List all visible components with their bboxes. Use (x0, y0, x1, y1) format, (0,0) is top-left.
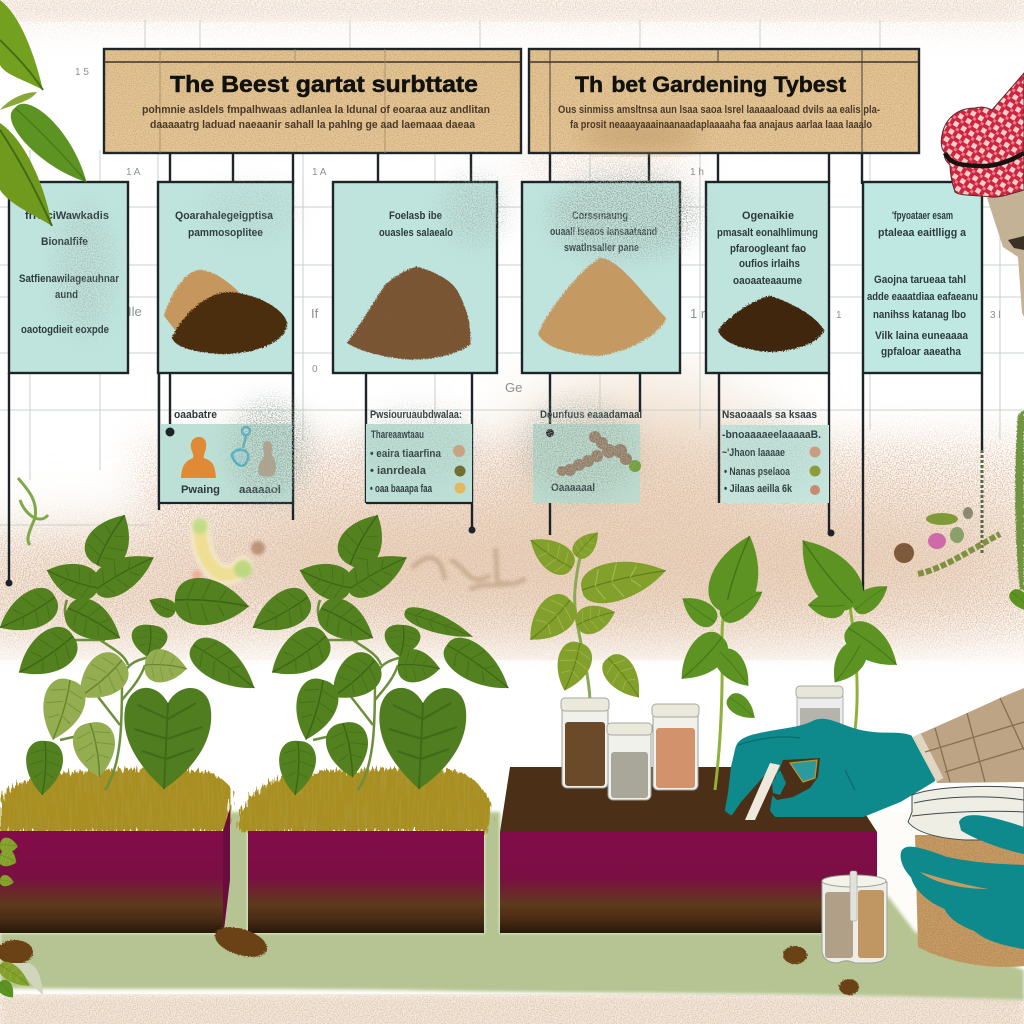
icon: teal tool (232, 427, 250, 466)
panel labels: Pwaing (181, 484, 220, 496)
icon: compost worm (557, 431, 632, 476)
list text: ~'Jhaon laaaae (722, 447, 785, 459)
thumb (772, 770, 786, 795)
small sample jar (822, 871, 887, 963)
card 6 text (867, 210, 978, 358)
icon: brown pile (347, 267, 470, 359)
background grid (0, 20, 1024, 525)
header panel: left (104, 49, 521, 153)
icon: bottom-left seedling (0, 837, 43, 1002)
list swatches (810, 446, 820, 495)
card 5 text (717, 210, 818, 287)
white marker (745, 763, 780, 820)
card 6 text: 'fpyoataer esam (892, 210, 953, 222)
stems (60, 600, 150, 790)
glove gap (770, 758, 820, 800)
decorative swatch: moss cluster (894, 507, 1000, 574)
planter 1 (0, 831, 223, 933)
panel heading: Nsaoaaals sa ksaas (722, 409, 817, 421)
grass 2 (240, 768, 492, 832)
card 2: sand and dark soil (158, 182, 293, 373)
card 2 text: pammosoplitee (188, 227, 263, 239)
seedling 4 (670, 528, 771, 790)
icon: dark soil pile (172, 292, 287, 354)
panel heading: Deunfuus eaaadamaal (540, 409, 642, 421)
icon: green clump (629, 460, 641, 472)
small panel: organic matter (533, 409, 642, 503)
beard (1008, 236, 1024, 250)
face (987, 188, 1024, 317)
list text: • eaira tiaarfina (370, 448, 442, 460)
margin labels: 3 l (990, 310, 1001, 321)
icon: dark pile (718, 296, 824, 352)
plant 2 (244, 505, 519, 796)
margin labels (75, 67, 1001, 395)
margin labels: 1 A (312, 167, 327, 178)
connector dots (6, 526, 834, 586)
planter 3 soil top (500, 767, 877, 832)
header subtext right (558, 104, 880, 131)
header subtext right: Ous sinmiss amsltnsa aun lsaa saoa lsrel laaaaaloaad dvils aa ealis pla- (558, 104, 880, 116)
decorative swatch: pale colour blob (192, 518, 265, 580)
card 2 text: Qoarahalegeigptisa (175, 210, 274, 222)
icon: sand pile (538, 258, 666, 356)
card 5 text: pfaroogleant fao (730, 243, 806, 255)
big jar of substrate (908, 786, 1024, 967)
card 4 text: swatlnsaller pane (564, 242, 639, 254)
list text: Thareaawtaau (371, 429, 424, 441)
card 1 text: frrs ciWawkadis (25, 210, 109, 222)
hat band (945, 153, 1024, 166)
list swatches (453, 445, 466, 494)
planter 3 front (500, 832, 877, 933)
card 6 text: Vilk laina euneaaaa (875, 330, 969, 342)
margin labels: If (311, 306, 319, 321)
small panel: benefits icons (159, 373, 293, 503)
glass jar: back (796, 686, 843, 742)
connector dot (546, 429, 554, 437)
soft white fog above beds (0, 672, 1024, 802)
plant bed 1 (0, 768, 232, 933)
panel label: Oaaaaaal (551, 482, 595, 494)
list text: • Nanas pselaoa (724, 466, 791, 478)
card 3 text: ouasles salaealo (379, 227, 453, 239)
moss strip (980, 450, 984, 555)
connector lines (9, 153, 982, 600)
card 3 text: Foelasb ibe (389, 210, 442, 222)
icon: orange person (181, 437, 216, 478)
icon: teal glove (727, 721, 933, 820)
icon: left tendril (18, 478, 48, 545)
card 5 text: Ogenaikie (742, 210, 794, 222)
margin labels: 1 h (690, 167, 704, 178)
plant bed 2 (240, 768, 492, 933)
header subtext left: pohmnie asldels fmpalhwaas adlanlea la ldunal of eoaraa auz andlitan (142, 104, 490, 116)
list text (370, 429, 442, 495)
icon: top-left foliage (0, 0, 99, 226)
margin labels: 1 r (690, 306, 706, 321)
card 4 text: ouaall lseaos lansaataand (550, 226, 657, 238)
card 6 text: ptaleaa eaitlligg a (878, 227, 967, 239)
card 6 text: nanihss katanag lbo (873, 309, 966, 321)
card 2 text (175, 210, 274, 239)
planter 2 (248, 831, 484, 933)
card 1 text: Bionalfife (41, 236, 88, 248)
icon: tan figure (258, 441, 276, 477)
icon: teal glove holding jar (902, 816, 1024, 948)
card 1 text: Satfienawilageauhnar (19, 273, 120, 285)
icon: sand pile (164, 270, 242, 330)
sleeve (913, 688, 1024, 783)
jar lid (908, 786, 1024, 840)
card 1 text: oaotogdieit eoxpde (21, 324, 109, 336)
glass jar: grey (607, 723, 652, 800)
header title right: Th bet Gardening Tybest (575, 72, 847, 97)
card 5 text: oaoaateaaume (733, 275, 802, 287)
header title left: The Beest gartat surbttate (170, 71, 478, 97)
card 4 text: Corssmaung (572, 210, 628, 222)
header subtext left: daaaaatrg laduad naeaanir sahall la pahlng ge aad laemaaa daeaa (150, 119, 476, 131)
card 3 text (379, 210, 453, 239)
card 6 text: gpfaloar aaeatha (881, 346, 962, 358)
ground (0, 812, 1024, 994)
card 1 text: aund (55, 289, 78, 301)
card 5 text: oufios irlaihs (739, 258, 800, 270)
header subtext right: fa prosit neaaayaaainaanaadaplaaaaha faa anajaus aarlaa laaa laaalo (570, 119, 872, 131)
planter 1 side (223, 808, 230, 930)
margin labels: Ge (505, 380, 522, 395)
list text: • Jilaas aeilla 6k (724, 483, 793, 495)
stems (313, 600, 403, 790)
plant 1 (0, 505, 265, 796)
connector dot (166, 428, 174, 436)
card speckle overlay (46, 158, 820, 512)
margin labels: 1 A (126, 167, 141, 178)
panel labels: aaaaaol (239, 484, 281, 496)
decorative swatch: root squiggles (412, 548, 525, 590)
panel heading: Pwsiouruaubdwalaa: (370, 409, 462, 421)
icon: green leaf edge (1006, 586, 1024, 617)
margin labels: 0 (312, 364, 318, 375)
icon: person with checked hat (941, 73, 1024, 317)
jar lid rings (912, 797, 1024, 816)
glass jar: salmon (652, 704, 699, 790)
ground surface (0, 812, 1024, 1000)
card 5: dark soil (706, 182, 829, 373)
seedling 5 (785, 527, 907, 730)
header panel: right (529, 49, 919, 153)
plant bed 3 (500, 767, 877, 933)
list text: • oaa baaapa faa (370, 483, 433, 495)
panel labels (181, 484, 281, 496)
glove gap highlight (790, 760, 817, 782)
list text: -bnoaaaaeelaaaaaB. (722, 429, 821, 441)
small panel: nutrient list 1 (366, 409, 472, 503)
card 3: brown substrate (333, 182, 497, 373)
header subtext left (142, 104, 490, 131)
glass jar: brown (561, 698, 609, 788)
hat (941, 73, 1024, 197)
icon: right-edge moss (1015, 410, 1024, 590)
small panel: nutrient list 2 (721, 409, 829, 503)
finger gap (920, 872, 988, 889)
card 4: sand (522, 182, 680, 373)
card 6: text only (863, 182, 982, 373)
list text: • ianrdeala (370, 465, 427, 477)
card 5 text: pmasalt eonalhlimung (717, 227, 818, 239)
seedling 3 (518, 526, 670, 706)
card 4 text (550, 210, 657, 254)
list text (722, 429, 821, 495)
margin labels: 1 (836, 310, 842, 321)
soil clods (0, 922, 859, 995)
glove folds (738, 737, 855, 790)
jar body (915, 835, 1024, 967)
margin labels: Ile (128, 304, 142, 319)
grass 1 (0, 768, 232, 832)
card 6 text: Gaojna tarueaa tahl (874, 274, 966, 286)
margin labels: 1 5 (75, 67, 89, 78)
panel heading: oaabatre (174, 409, 217, 421)
card 1: text only (9, 182, 128, 373)
card 1 text (19, 210, 120, 336)
card 6 text: adde eaaatdiaa eafaeanu (867, 291, 978, 303)
